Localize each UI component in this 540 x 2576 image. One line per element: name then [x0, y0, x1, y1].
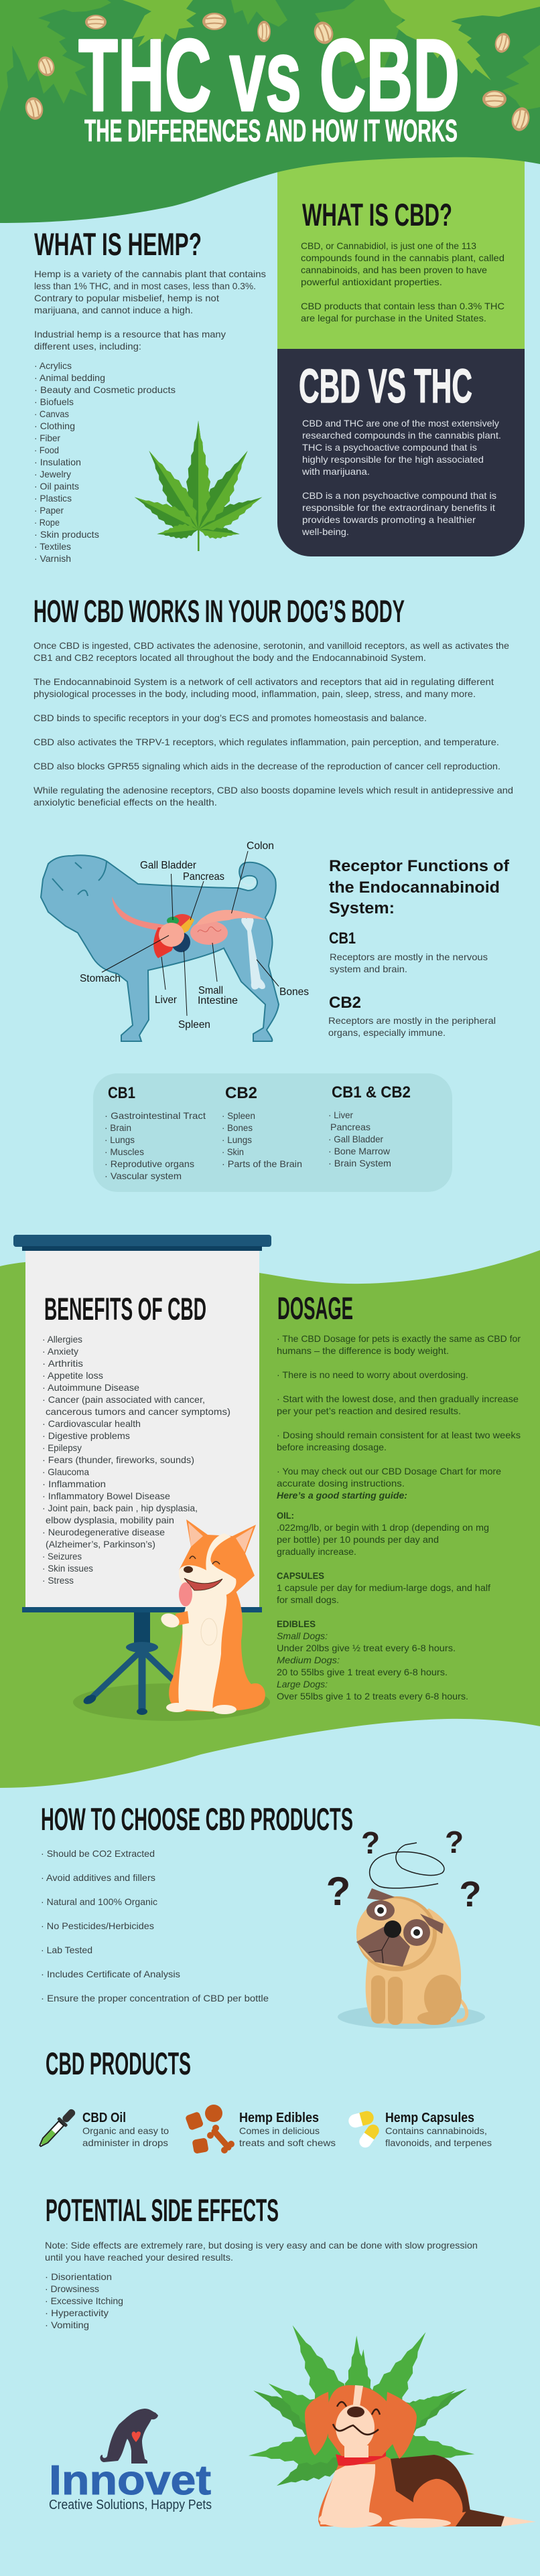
organ: stomach [159, 923, 184, 947]
screen shadow [73, 1683, 270, 1721]
text: hemp edibles [239, 2111, 336, 2148]
text: edibles: Small Dogs: [277, 1631, 328, 1641]
list: side effects: · Drowsiness [45, 2283, 99, 2294]
beagle mouth [333, 2424, 379, 2435]
projector screen: benefits of CBD [13, 1235, 271, 1721]
text: dosage tips: Here’s a good starting guide: [277, 1490, 407, 1501]
beagle muzzle [336, 2405, 375, 2450]
text: CBD vs THC body [301, 418, 501, 537]
text: dosage tips: · Dosing should remain consistent for at least two weeks [277, 1430, 521, 1440]
heading: benefits: BENEFITS OF CBD [44, 1291, 206, 1327]
list: benefits: · Arthritis [42, 1358, 83, 1369]
pug body [366, 1908, 461, 2024]
organ labels: Gall Bladder [140, 860, 197, 871]
list: benefits [42, 1334, 230, 1586]
text: dosage tips: before increasing dosage. [277, 1442, 387, 1452]
list: hemp uses: · Plastics [34, 493, 72, 504]
column: CB1 and CB2: · Gall Bladder [328, 1134, 383, 1144]
text: how CBD works body: The Endocannabinoid System is a network of cell activators and receptors that aid in regulating different [33, 676, 494, 687]
text: capsules: 1 capsule per day for medium-large dogs, and half [277, 1582, 490, 1593]
organ labels: Spleen [178, 1019, 210, 1031]
text: CBD vs THC body: with marijuana. [301, 466, 370, 477]
heading: side effects: POTENTIAL SIDE EFFECTS [46, 2192, 279, 2228]
text: hemp edibles: Comes in delicious [239, 2125, 320, 2136]
text: edibles: Over 55lbs give 1 to 2 treats every 6-8 hours. [277, 1691, 468, 1701]
text: how CBD works body: physiological processes in the body, including mood, inflammation, pain, sleep, stress, and many more. [33, 688, 476, 699]
pug front legs [371, 1975, 385, 2024]
text: CBD oil: administer in drops [82, 2137, 168, 2148]
list: benefits: · Joint pain, back pain , hip dysplasia, [42, 1503, 198, 1513]
section: how CBD works [33, 593, 513, 808]
beagle collar [336, 2447, 386, 2466]
list: side effects: · Vomiting [45, 2320, 89, 2330]
list: how to choose: · No Pesticides/Herbicides [41, 1920, 154, 1931]
column: CB1: · Vascular system [105, 1170, 182, 1181]
text: hemp intro: marijuana, and cannot induce a high. [34, 305, 193, 315]
text: hemp edibles: Hemp Edibles [239, 2111, 319, 2125]
question marks [326, 1825, 481, 1914]
list: benefits: · Appetite loss [42, 1370, 103, 1381]
organ labels: Pancreas [183, 871, 224, 883]
list: benefits: · Digestive problems [42, 1430, 130, 1441]
text: what is CBD body: are legal for purchase in the United States. [301, 313, 486, 323]
text: CB1: Receptors are mostly in the nervous [330, 952, 488, 962]
list: hemp uses: · Beauty and Cosmetic products [34, 384, 176, 395]
beagle chest [320, 2464, 375, 2524]
text: hemp capsules: Hemp Capsules [385, 2111, 474, 2125]
text: capsules: for small dogs. [277, 1594, 339, 1605]
corgi nose [184, 1566, 193, 1573]
text: oil: per bottle) per 10 pounds per day and [277, 1534, 439, 1545]
column: CB1 and CB2: · Bone Marrow [328, 1146, 391, 1156]
leaf: right edge [502, 45, 540, 110]
text: CBD vs THC body: CBD and THC are one of the most extensively [302, 418, 499, 429]
screen surface [25, 1251, 259, 1607]
list: side effects: · Hyperactivity [45, 2307, 109, 2318]
text: what is CBD body: powerful antioxidant properties. [301, 277, 442, 287]
text: how CBD works body: CBD binds to specific receptors in your dog’s ECS and promotes homeostasis and balance. [33, 712, 427, 723]
dog face details [52, 861, 107, 896]
text: hemp intro: Hemp is a variety of the cannabis plant that contains [34, 269, 266, 279]
organ: spleen [172, 932, 190, 952]
logo dog [100, 2409, 158, 2464]
text: how CBD works body [33, 640, 513, 808]
list: hemp uses: · Rope [34, 517, 60, 528]
corgi arm and paw [176, 1611, 189, 1626]
list: benefits: · Neurodegenerative disease [42, 1527, 165, 1537]
text: side effects note [45, 2240, 478, 2263]
heading: what is CBD: WHAT IS CBD? [302, 197, 452, 232]
list: how to choose: · Should be CO2 Extracted [41, 1848, 155, 1859]
column: CB1 and CB2 [328, 1083, 411, 1168]
corgi eyes [190, 1556, 220, 1564]
organ: liver top [172, 914, 193, 929]
seeds [23, 13, 532, 133]
leader lines [102, 851, 279, 1016]
column: CB1 and CB2: CB1 & CB2 [332, 1083, 411, 1102]
list: hemp uses [34, 360, 176, 564]
text: capsules: CAPSULES [277, 1570, 324, 1581]
illustration: beagle with hemp leaves [246, 2317, 536, 2528]
panel: receptor locations [93, 1073, 452, 1192]
list: hemp uses: · Biofuels [34, 396, 74, 407]
text: CBD oil [82, 2111, 169, 2148]
text: CBD oil: CBD Oil [82, 2111, 126, 2125]
text: dosage tips [277, 1333, 521, 1501]
corgi right paw [201, 1618, 217, 1645]
heading: what is hemp: WHAT IS HEMP? [34, 226, 202, 262]
list: benefits: · Inflammatory Bowel Disease [42, 1491, 170, 1501]
text: how CBD works body: CB1 and CB2 receptors located all throughout the body and the Endocannabinoid System. [33, 652, 426, 663]
question marks: ? [326, 1869, 350, 1914]
column: CB2: · Spleen [222, 1110, 255, 1121]
text: hemp intro: Contrary to popular misbelief, hemp is not [34, 293, 219, 303]
list: benefits: elbow dysplasia, mobility pain [46, 1515, 174, 1525]
list: how to choose: · Lab Tested [41, 1945, 92, 1955]
text: how CBD works body: CBD also blocks GPR55 signaling which aids in the decrease of the reproduction of cancer cell reproduction. [33, 761, 500, 771]
list: benefits: · Epilepsy [42, 1442, 82, 1453]
text: hemp intro: less than 1% THC, and in most cases, less than 0.3%. [34, 281, 256, 291]
corgi chest [178, 1590, 226, 1712]
text: hemp intro: different uses, including: [34, 341, 141, 352]
organ labels: Small [198, 985, 223, 996]
list: side effects [45, 2271, 123, 2330]
beagle body [318, 2454, 469, 2526]
list: benefits: · Skin issues [42, 1563, 93, 1574]
beagle blaze [352, 2385, 363, 2411]
green band background [0, 1250, 540, 1788]
text: CBD vs THC body: CBD is a non psychoactive compound that is [302, 490, 496, 501]
text: edibles: Medium Dogs: [277, 1655, 340, 1665]
text: hemp capsules: flavonoids, and terpenes [385, 2137, 492, 2148]
organ labels: Bones [279, 986, 309, 998]
dizzy squiggle [370, 1843, 444, 1888]
heading: receptor functions [329, 857, 510, 917]
text: what is CBD body: cannabinoids, and has been proven to have [301, 264, 487, 275]
pug tail [457, 1999, 467, 2021]
list: benefits: · Cardiovascular health [42, 1418, 141, 1429]
column: CB1 and CB2: · Brain System [328, 1158, 391, 1168]
list: benefits: · Inflammation [42, 1479, 106, 1489]
leaf: top left [0, 0, 111, 112]
list: benefits: · Stress [42, 1575, 74, 1586]
column: CB1: · Brain [105, 1122, 131, 1133]
corgi feet [166, 1703, 188, 1712]
column: CB2: · Parts of the Brain [222, 1158, 302, 1169]
text: what is CBD body [301, 240, 504, 323]
corgi tongue [179, 1582, 192, 1606]
text: hemp intro [34, 269, 266, 352]
text: edibles: Large Dogs: [277, 1679, 328, 1689]
column: CB2: · Lungs [222, 1134, 252, 1145]
organ labels [80, 840, 309, 1031]
section: receptor functions [328, 857, 510, 1038]
question marks: ? [361, 1825, 380, 1860]
column: CB1: · Muscles [105, 1146, 144, 1157]
list: benefits: · Autoimmune Disease [42, 1382, 139, 1393]
beagle leaves [246, 2317, 476, 2500]
list: benefits: cancerous tumors and cancer symptoms) [46, 1406, 230, 1417]
text: dosage tips: accurate dosing instructions. [277, 1478, 405, 1489]
text: dosage tips: · There is no need to worry about overdosing. [277, 1369, 468, 1380]
bone [241, 917, 265, 990]
list: hemp uses: · Skin products [34, 529, 99, 540]
heading: CBD products: CBD PRODUCTS [46, 2046, 191, 2081]
diagram: dog anatomy [41, 840, 309, 1041]
icon: treats [185, 2105, 234, 2154]
text: how CBD works body: CBD also activates the TRPV-1 receptors, which regulates inflammation, pain perception, and temperature. [33, 737, 499, 747]
organ: colon [196, 910, 267, 925]
organ: gall bladder [167, 917, 179, 925]
text: hemp capsules: Contains cannabinoids, [385, 2125, 487, 2136]
text: dosage tips: · The CBD Dosage for pets is exactly the same as CBD for [277, 1333, 521, 1344]
text: dosage tips: humans – the difference is body weight. [277, 1345, 449, 1356]
question marks: ? [445, 1825, 464, 1860]
header banner with leaves and seeds [0, 0, 540, 223]
column: CB1: · Gastrointestinal Tract [105, 1110, 206, 1121]
corgi body [169, 1588, 265, 1712]
pug ears [367, 1888, 444, 1934]
list: how to choose: · Includes Certificate of Analysis [41, 1969, 180, 1979]
illustration: confused pug [326, 1825, 485, 2029]
column: CB1 and CB2: · Liver [328, 1110, 353, 1120]
heading: dosage: DOSAGE [277, 1290, 353, 1326]
leaf: centre [231, 0, 287, 27]
list: hemp uses: · Jewelry [34, 469, 71, 479]
subheading: CB1: CB1 [329, 929, 356, 948]
column: CB2: · Bones [222, 1122, 253, 1133]
column: CB2: · Skin [222, 1146, 244, 1157]
organ: pancreas [179, 917, 194, 933]
text: what is CBD body: compounds found in the cannabis plant, called [301, 252, 504, 263]
text: CBD vs THC body: highly responsible for the high associated [302, 454, 484, 465]
list: hemp uses: · Fiber [34, 433, 60, 443]
corgi ear inners [188, 1523, 253, 1552]
text: what is CBD body: CBD, or Cannabidiol, is just one of the 113 [301, 240, 476, 251]
text: what is CBD body: CBD products that contain less than 0.3% THC [301, 301, 504, 311]
subheading: CB2: CB2 [329, 994, 361, 1012]
list: hemp uses: · Oil paints [34, 481, 79, 491]
organ: esophagus [112, 897, 164, 931]
column: CB1: CB1 [108, 1084, 135, 1102]
pug mouth [368, 1937, 389, 1963]
list: how to choose [41, 1848, 269, 2003]
text: edibles: Under 20lbs give ½ treat every 6-8 hours. [277, 1643, 456, 1653]
text: CB2: organs, especially immune. [328, 1027, 446, 1038]
leaf: centre right [315, 0, 409, 79]
column: CB1 and CB2: Pancreas [330, 1122, 370, 1132]
beagle tail [455, 2509, 504, 2526]
list: hemp uses: · Clothing [34, 421, 75, 431]
text: edibles: 20 to 55lbs give 1 treat every 6-8 hours. [277, 1667, 448, 1677]
pug eye patches and eyes [366, 1900, 430, 1946]
text: CBD vs THC body: well-being. [301, 526, 349, 537]
beagle head [328, 2385, 399, 2456]
list: how to choose: · Natural and 100% Organic [41, 1896, 157, 1907]
column: CB1 [105, 1084, 206, 1181]
list: side effects: · Excessive Itching [45, 2295, 123, 2306]
text: oil: .022mg/lb, or begin with 1 drop (depending on mg [277, 1522, 489, 1533]
organ labels: Liver [155, 994, 178, 1006]
column: CB2 [222, 1084, 302, 1169]
text: capsules [277, 1570, 490, 1605]
beagle ears [305, 2392, 330, 2455]
icon: dropper [36, 2106, 78, 2150]
list: benefits: (Alzheimer’s, Parkinson’s) [46, 1539, 155, 1549]
list: benefits: · Glaucoma [42, 1466, 89, 1477]
list: hemp uses: · Textiles [34, 541, 71, 552]
beagle neck cream [344, 2445, 368, 2457]
text: oil: OIL: [277, 1510, 294, 1521]
list: benefits: · Fears (thunder, fireworks, sounds) [42, 1454, 194, 1465]
product: hemp capsules [347, 2109, 492, 2150]
list: hemp uses: · Varnish [34, 553, 71, 564]
text: CB1: system and brain. [330, 964, 407, 974]
list: hemp uses: · Acrylics [34, 360, 72, 371]
text: dosage tips: · You may check out our CBD Dosage Chart for more [277, 1466, 501, 1476]
text: side effects note: until you have reached your desired results. [45, 2252, 233, 2263]
corgi mouth [184, 1578, 222, 1590]
section: how to choose [41, 1801, 353, 2003]
list: hemp uses: · Insulation [34, 457, 81, 467]
pug nose [384, 1920, 401, 1938]
text: oil [277, 1510, 489, 1557]
text: CBD vs THC body: researched compounds in the cannabis plant. [302, 430, 501, 441]
text: CB1 [330, 952, 488, 974]
text: how CBD works body: While regulating the adenosine receptors, CBD also boosts dopamine levels which result in antidepressive and [33, 785, 513, 795]
list: how to choose: · Ensure the proper concentration of CBD per bottle [41, 1993, 269, 2003]
column: CB1: · Reprodutive organs [105, 1158, 194, 1169]
heading: receptor functions: the Endocannabinoid [329, 879, 500, 897]
logo: Innovet [49, 2409, 212, 2512]
text: side effects note: Note: Side effects are extremely rare, but dosing is very easy and can be done with slow progression [45, 2240, 478, 2251]
beagle paws [319, 2510, 382, 2528]
list: benefits: · Anxiety [42, 1346, 78, 1357]
section: potential side effects [45, 2192, 478, 2330]
text: CBD oil: Organic and easy to [82, 2125, 169, 2136]
pug thigh and foot [424, 1975, 462, 2020]
list: hemp uses: · Animal bedding [34, 372, 105, 383]
leaf: centre left light [123, 0, 196, 47]
tail hollow [243, 879, 255, 885]
beagle saddle [391, 2455, 470, 2512]
text: dosage tips: · Start with the lowest dose, and then gradually increase [277, 1393, 519, 1404]
text: CB2 [328, 1015, 496, 1038]
organ: small intestine [190, 921, 228, 945]
panel: what is CBD [277, 147, 525, 349]
text: dosage tips: per your pet’s reaction and desired results. [277, 1406, 461, 1416]
logo tagline: Creative Solutions, Happy Pets [49, 2498, 212, 2512]
text: edibles [277, 1618, 468, 1701]
section: what is hemp [34, 226, 267, 564]
list: benefits: · Allergies [42, 1334, 82, 1345]
text: edibles: EDIBLES [277, 1618, 316, 1629]
dog body silhouette [41, 855, 279, 1041]
question marks: ? [460, 1874, 481, 1914]
corgi face blaze [179, 1533, 237, 1597]
icon: hemp leaf [130, 421, 267, 551]
list: benefits: · Cancer (pain associated with cancer, [42, 1394, 205, 1405]
screen stand [82, 1612, 194, 1715]
leaf: right light [384, 0, 540, 80]
text: CBD vs THC body: THC is a psychoactive compound that is [302, 442, 477, 453]
section: dosage [277, 1290, 521, 1701]
screen bottom bar [22, 1607, 262, 1612]
organ labels: Intestine [198, 995, 238, 1006]
heading: receptor functions: Receptor Functions of [329, 857, 510, 875]
product: CBD oil [36, 2106, 169, 2150]
text: hemp intro: Industrial hemp is a resource that has many [34, 329, 226, 339]
organ: liver [153, 927, 182, 958]
pug shadow [338, 2005, 485, 2029]
list: how to choose: · Avoid additives and fillers [41, 1872, 155, 1883]
organ labels: Stomach [80, 973, 121, 984]
text: hemp edibles: treats and soft chews [239, 2137, 336, 2148]
section: CBD products [36, 2046, 492, 2154]
organ labels: Colon [247, 840, 274, 852]
list: hemp uses: · Paper [34, 505, 64, 516]
logo heart [132, 2431, 141, 2442]
corgi head [179, 1519, 256, 1592]
list: side effects: · Disorientation [45, 2271, 112, 2282]
beagle eyes [337, 2402, 380, 2415]
pug muzzle [356, 1924, 410, 1967]
panel: CBD vs THC [277, 349, 525, 556]
text: CBD vs THC body: provides towards promoting a healthier [302, 514, 476, 525]
text: oil: gradually increase. [277, 1546, 356, 1557]
logo wordmark: Innovet [49, 2457, 211, 2504]
text: CB2: Receptors are mostly in the peripheral [328, 1015, 496, 1026]
list: hemp uses: · Food [34, 445, 59, 455]
screen top bar [13, 1235, 271, 1251]
column: CB1: · Lungs [105, 1134, 135, 1145]
beagle nose [347, 2407, 364, 2417]
list: benefits: · Seizures [42, 1551, 82, 1562]
heading: receptor functions: System: [329, 899, 395, 917]
text: how CBD works body: anxiolytic beneficial effects on the health. [33, 797, 217, 808]
icon: capsules [347, 2109, 381, 2150]
text: CBD vs THC body: responsible for the extraordinary benefits it [302, 502, 495, 513]
list: hemp uses: · Canvas [34, 408, 69, 419]
column: CB2: CB2 [225, 1084, 257, 1102]
pug head [356, 1896, 437, 1971]
text: hemp capsules [385, 2111, 492, 2148]
product: hemp edibles [185, 2105, 336, 2154]
illustration: corgi [159, 1519, 265, 1714]
text: how CBD works body: Once CBD is ingested, CBD activates the adenosine, serotonin, and vanilloid receptors, as well as activates the [33, 640, 509, 651]
